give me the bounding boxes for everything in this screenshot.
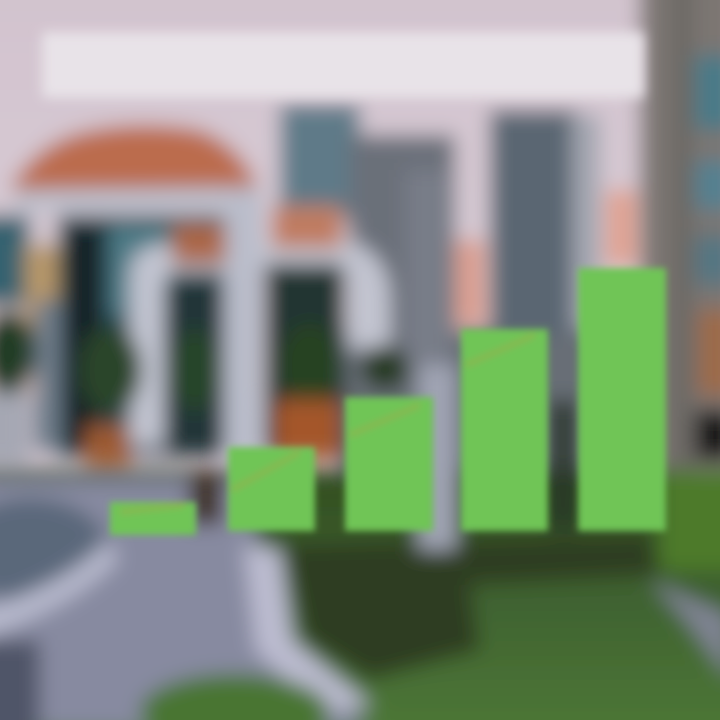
bar 2 — [228, 447, 315, 531]
tower backdrop behind the bars — [340, 330, 640, 480]
bar chart — [110, 268, 666, 535]
building dark glazing — [0, 215, 345, 465]
main building — [0, 125, 576, 550]
title banner — [42, 32, 644, 98]
trees and planters — [0, 310, 576, 550]
trend tints on bars — [120, 335, 535, 512]
background tower two — [490, 110, 600, 335]
salmon sky strips — [456, 190, 636, 325]
building white frame — [15, 184, 390, 460]
ground — [0, 470, 720, 720]
background tower one — [280, 104, 455, 370]
right foreground building — [640, 0, 720, 480]
bar 5 — [578, 268, 666, 531]
bar 4 — [461, 329, 548, 531]
sky background — [0, 0, 720, 400]
building terracotta roofs — [10, 125, 342, 264]
bar 3 — [345, 397, 433, 531]
bar 1 — [110, 502, 196, 535]
